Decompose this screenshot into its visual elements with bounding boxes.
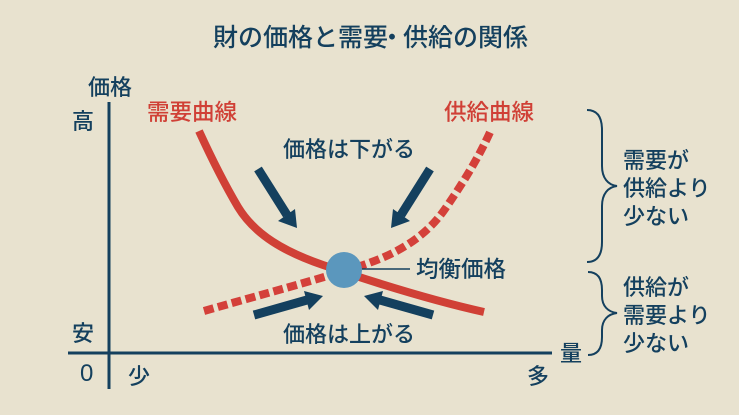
text: supply below demand: 需要より <box>623 303 711 328</box>
bracket: upper <box>587 110 617 262</box>
demand curve <box>199 131 484 312</box>
axes <box>68 102 552 389</box>
y-axis labels: 高 <box>72 109 94 134</box>
equilibrium label: 均衡価格 <box>416 257 507 282</box>
arrow: bottom right <box>364 291 433 315</box>
text: supply below demand: 少ない <box>623 331 689 356</box>
arrow: bottom left <box>254 291 323 315</box>
equilibrium point <box>326 252 362 288</box>
y-axis labels: 価格 <box>88 75 132 100</box>
title: 財の価格と需要 <box>213 24 388 52</box>
text: supply below demand: 供給が <box>623 275 689 300</box>
y-axis labels <box>72 75 132 387</box>
price rises label: 価格は上がる <box>283 322 415 347</box>
equilibrium leader line <box>362 268 410 270</box>
arrow: top left <box>258 169 297 228</box>
supply curve label: 供給曲線 <box>444 100 535 125</box>
price falls label: 価格は下がる <box>283 137 415 162</box>
text: supply below demand <box>623 275 711 356</box>
x-axis labels: 少 <box>128 364 150 389</box>
supply curve <box>204 130 491 311</box>
arrow: top right <box>391 169 430 228</box>
demand curve label: 需要曲線 <box>147 100 238 125</box>
text: demand below supply: 需要が <box>623 148 689 173</box>
text: demand below supply: 少ない <box>623 204 689 229</box>
title: 供給の関係 <box>403 24 528 52</box>
text: demand below supply: 供給より <box>623 176 711 201</box>
x-axis labels: 多 <box>527 364 549 389</box>
text: demand below supply <box>623 148 711 229</box>
x-axis labels <box>128 341 582 389</box>
y-axis labels: 0 <box>80 360 93 387</box>
title: ・ <box>380 24 405 52</box>
y-axis labels: 安 <box>72 321 94 346</box>
bracket: lower <box>588 272 617 355</box>
x-axis labels: 量 <box>560 341 582 366</box>
